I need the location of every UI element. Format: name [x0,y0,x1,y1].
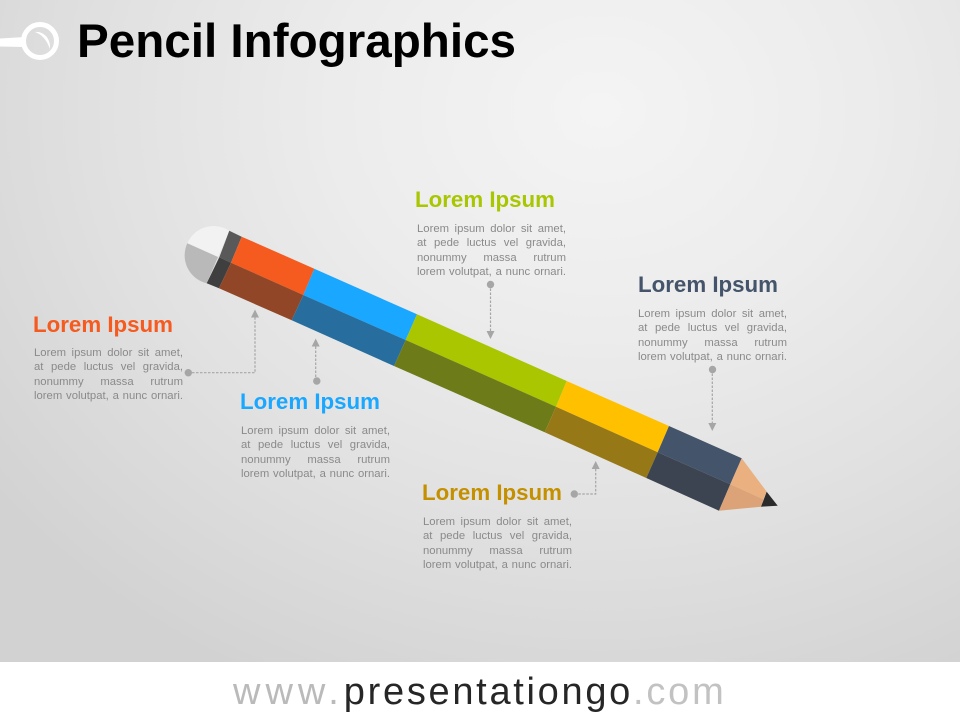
text block [34,347,183,402]
panel: navy callout [638,272,787,363]
panel: green callout [415,187,566,278]
heading: Lorem Ipsum [33,312,173,337]
connector: orange [185,310,259,376]
eraser [185,226,229,283]
connector: blue [312,338,320,385]
segment: yellow [545,381,669,478]
text block: nonummy massa rutrum [638,337,787,349]
text block: lorem volutpat, a nunc ornari. [423,559,572,571]
text block [423,516,572,571]
pencil lead [761,492,778,507]
connector: gold [571,461,600,498]
text block: at pede luctus vel gravida, [417,237,566,249]
heading: Lorem Ipsum [638,272,778,297]
title: Pencil Infographics [77,15,516,68]
connector: green [486,281,494,339]
text block [417,223,566,278]
text block: at pede luctus vel gravida, [34,361,183,373]
text block: nonummy massa rutrum [241,454,390,466]
text block [638,308,787,363]
footer [0,662,960,720]
text block: at pede luctus vel gravida, [423,530,572,542]
text block: Lorem ipsum dolor sit amet, [638,308,787,320]
text block: Lorem ipsum dolor sit amet, [241,425,390,437]
text block: at pede luctus vel gravida, [241,439,390,451]
panel: blue callout [240,389,390,480]
text block: lorem volutpat, a nunc ornari. [34,390,183,402]
segment: navy [646,426,742,511]
text block: at pede luctus vel gravida, [638,322,787,334]
text block: nonummy massa rutrum [417,252,566,264]
eraser band [207,231,242,288]
panel: orange callout [33,312,183,402]
heading: Lorem Ipsum [415,187,555,212]
segment: orange [219,237,314,320]
text block: Lorem ipsum dolor sit amet, [417,223,566,235]
panel: gold callout [422,480,572,571]
text block: nonummy massa rutrum [423,545,572,557]
heading: Lorem Ipsum [422,480,562,505]
text block: Lorem ipsum dolor sit amet, [34,347,183,359]
footer url: www.presentationgo.com [233,671,727,713]
icon: logo ring [0,24,56,58]
text block: lorem volutpat, a nunc ornari. [417,266,566,278]
text block [241,425,390,480]
text block: nonummy massa rutrum [34,376,183,388]
segment: blue [292,269,417,366]
text block: Lorem ipsum dolor sit amet, [423,516,572,528]
connector: navy [708,366,716,431]
text block: lorem volutpat, a nunc ornari. [241,468,390,480]
heading: Lorem Ipsum [240,389,380,414]
pencil tip wood [719,458,767,511]
pencil [185,226,778,511]
text block: lorem volutpat, a nunc ornari. [638,351,787,363]
segment: green [394,314,567,432]
